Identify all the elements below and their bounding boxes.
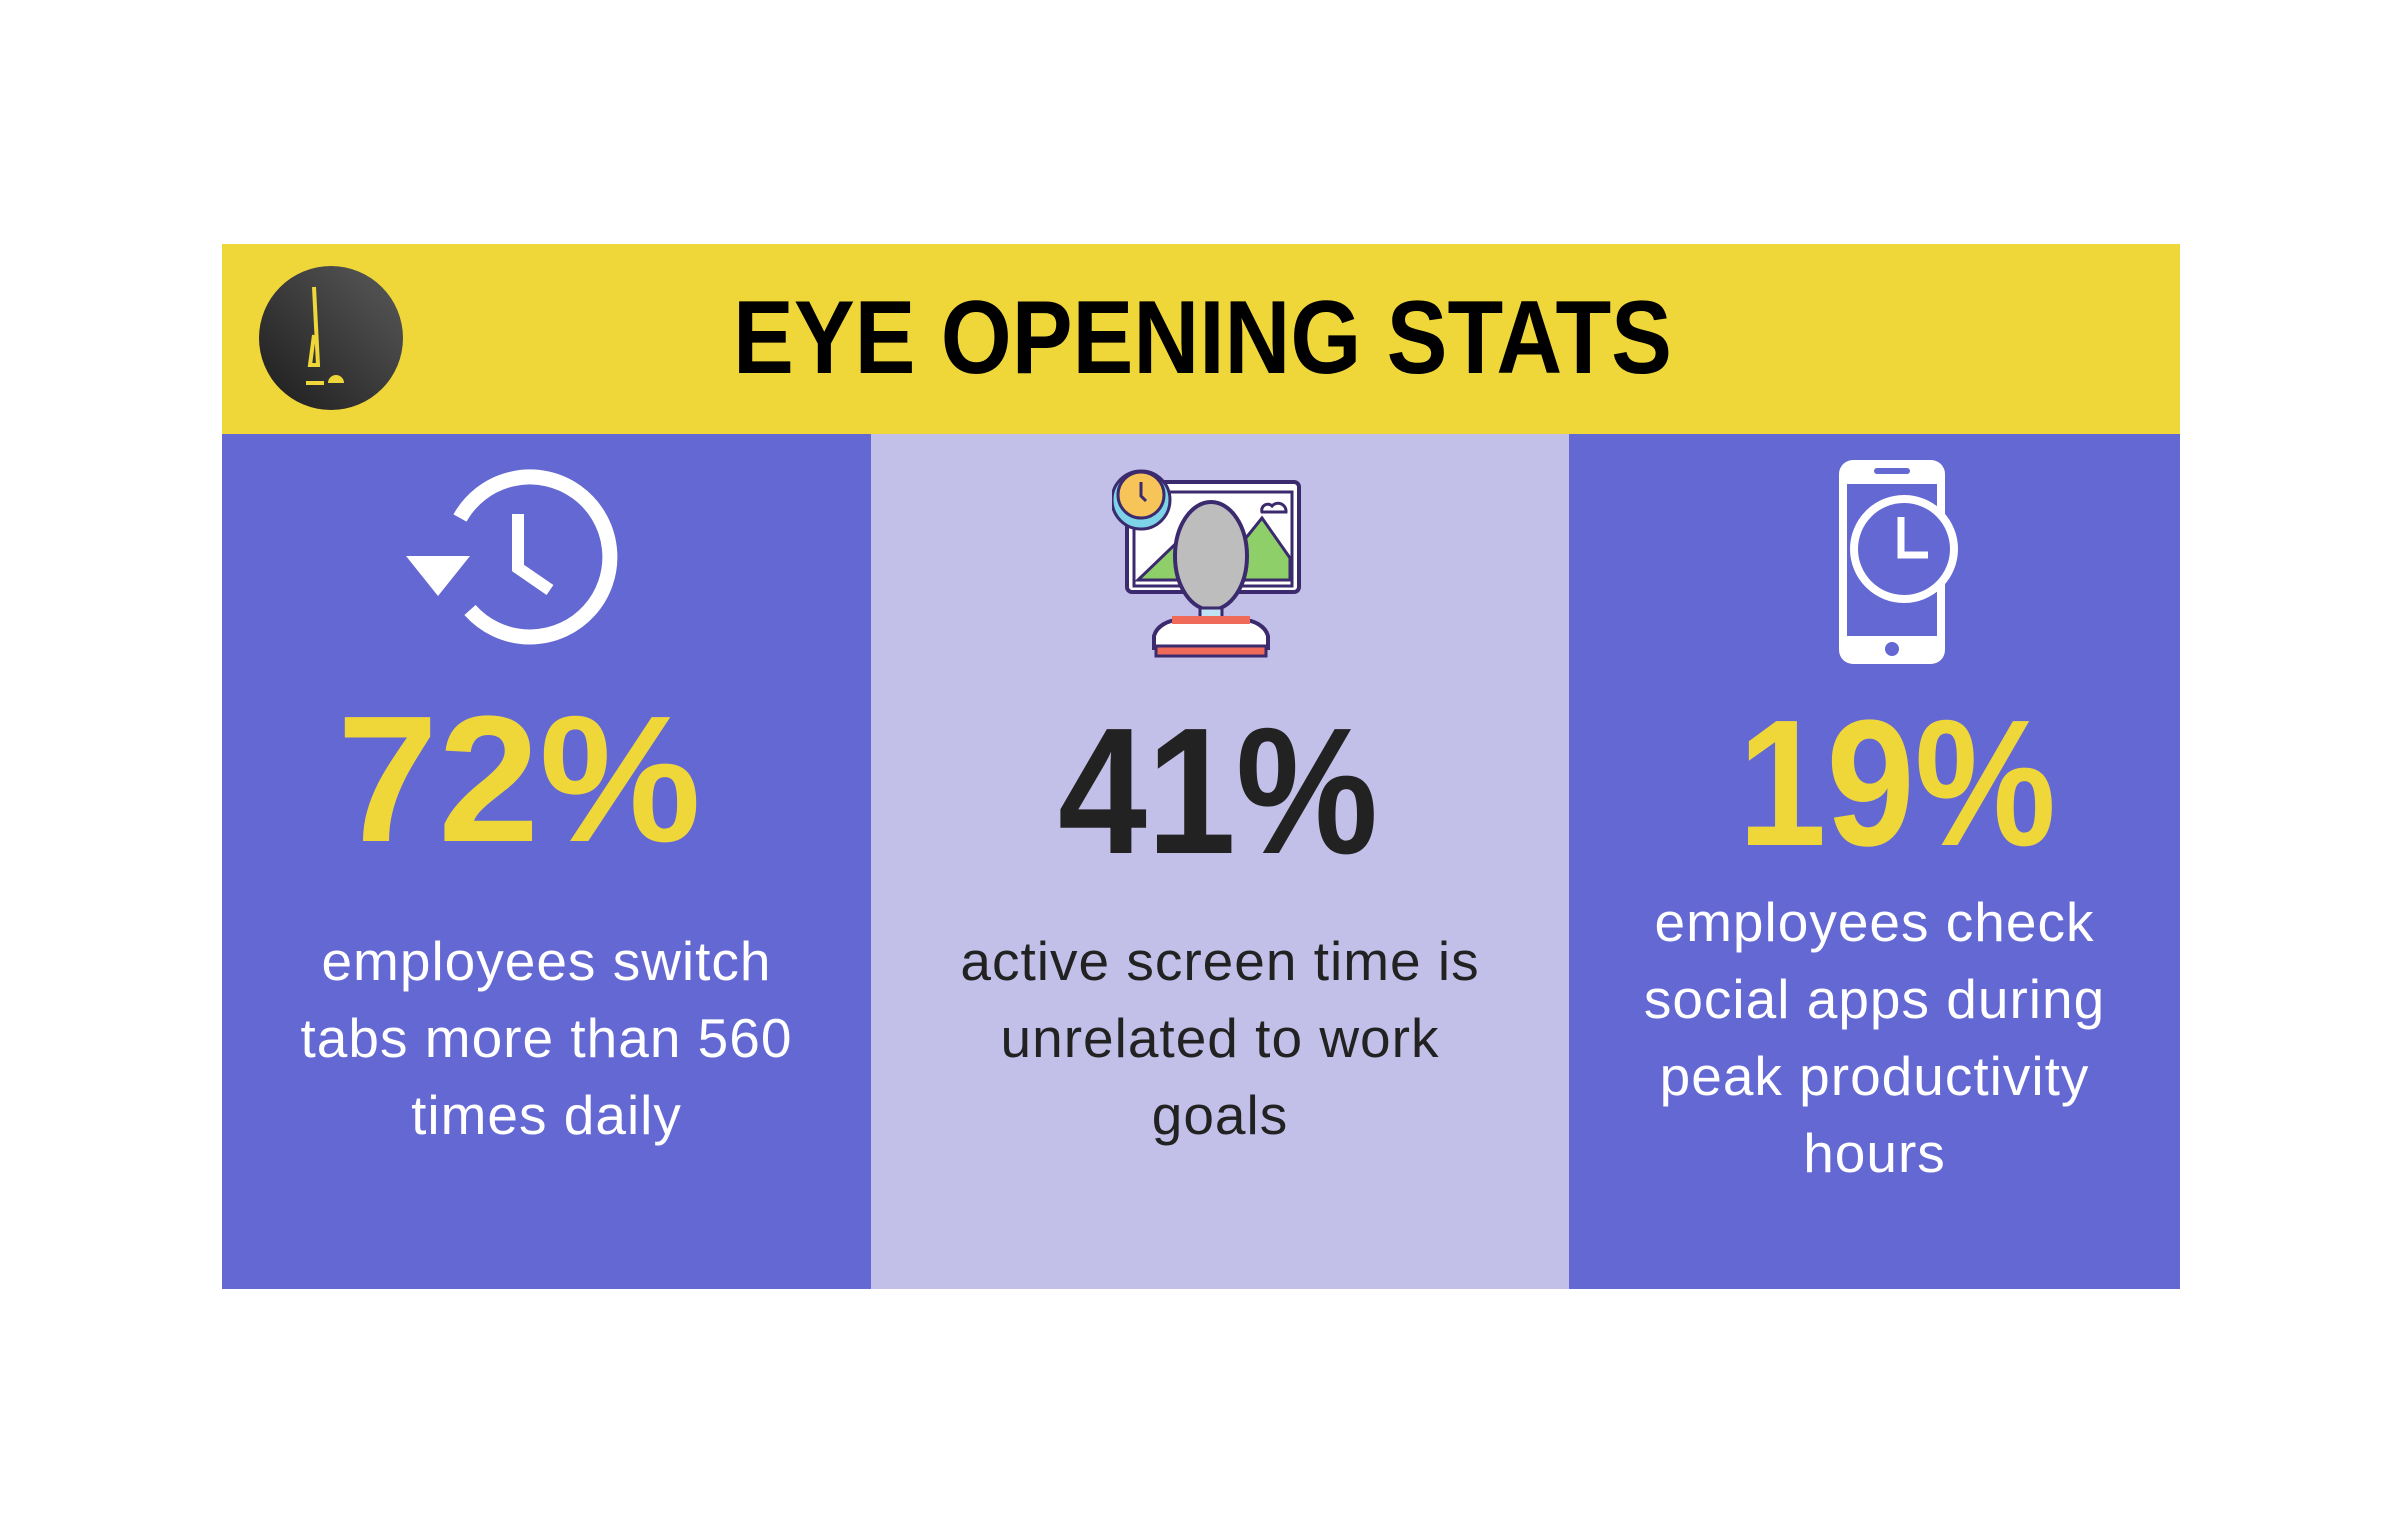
text: screen time description — [960, 930, 1480, 1146]
text: tabs description: times daily — [411, 1084, 682, 1146]
text: screen time description: unrelated to work — [1001, 1007, 1439, 1069]
panel: social apps — [1569, 434, 2180, 1289]
text: social apps description — [1644, 891, 2105, 1184]
icon: phone clock — [1839, 460, 1958, 664]
text: tabs description: employees switch — [321, 930, 772, 992]
icon: history clock — [406, 469, 618, 644]
title: EYE OPENING STATS — [733, 280, 1672, 396]
panel: screen time — [871, 434, 1569, 1289]
text: social apps description: social apps during — [1644, 968, 2105, 1030]
text: social apps description: peak productivity — [1660, 1045, 2089, 1107]
text: social apps description: employees check — [1655, 891, 2094, 953]
panel: tabs — [222, 434, 871, 1289]
text: tabs description — [301, 930, 792, 1146]
icon: person at screen — [1112, 470, 1301, 658]
text: screen time description: goals — [1152, 1084, 1288, 1146]
text: tabs description: tabs more than 560 — [301, 1007, 792, 1069]
text: social apps description: hours — [1803, 1122, 1946, 1184]
header bar — [222, 244, 2180, 434]
text: screen time description: active screen time is — [960, 930, 1480, 992]
logo — [259, 266, 403, 410]
